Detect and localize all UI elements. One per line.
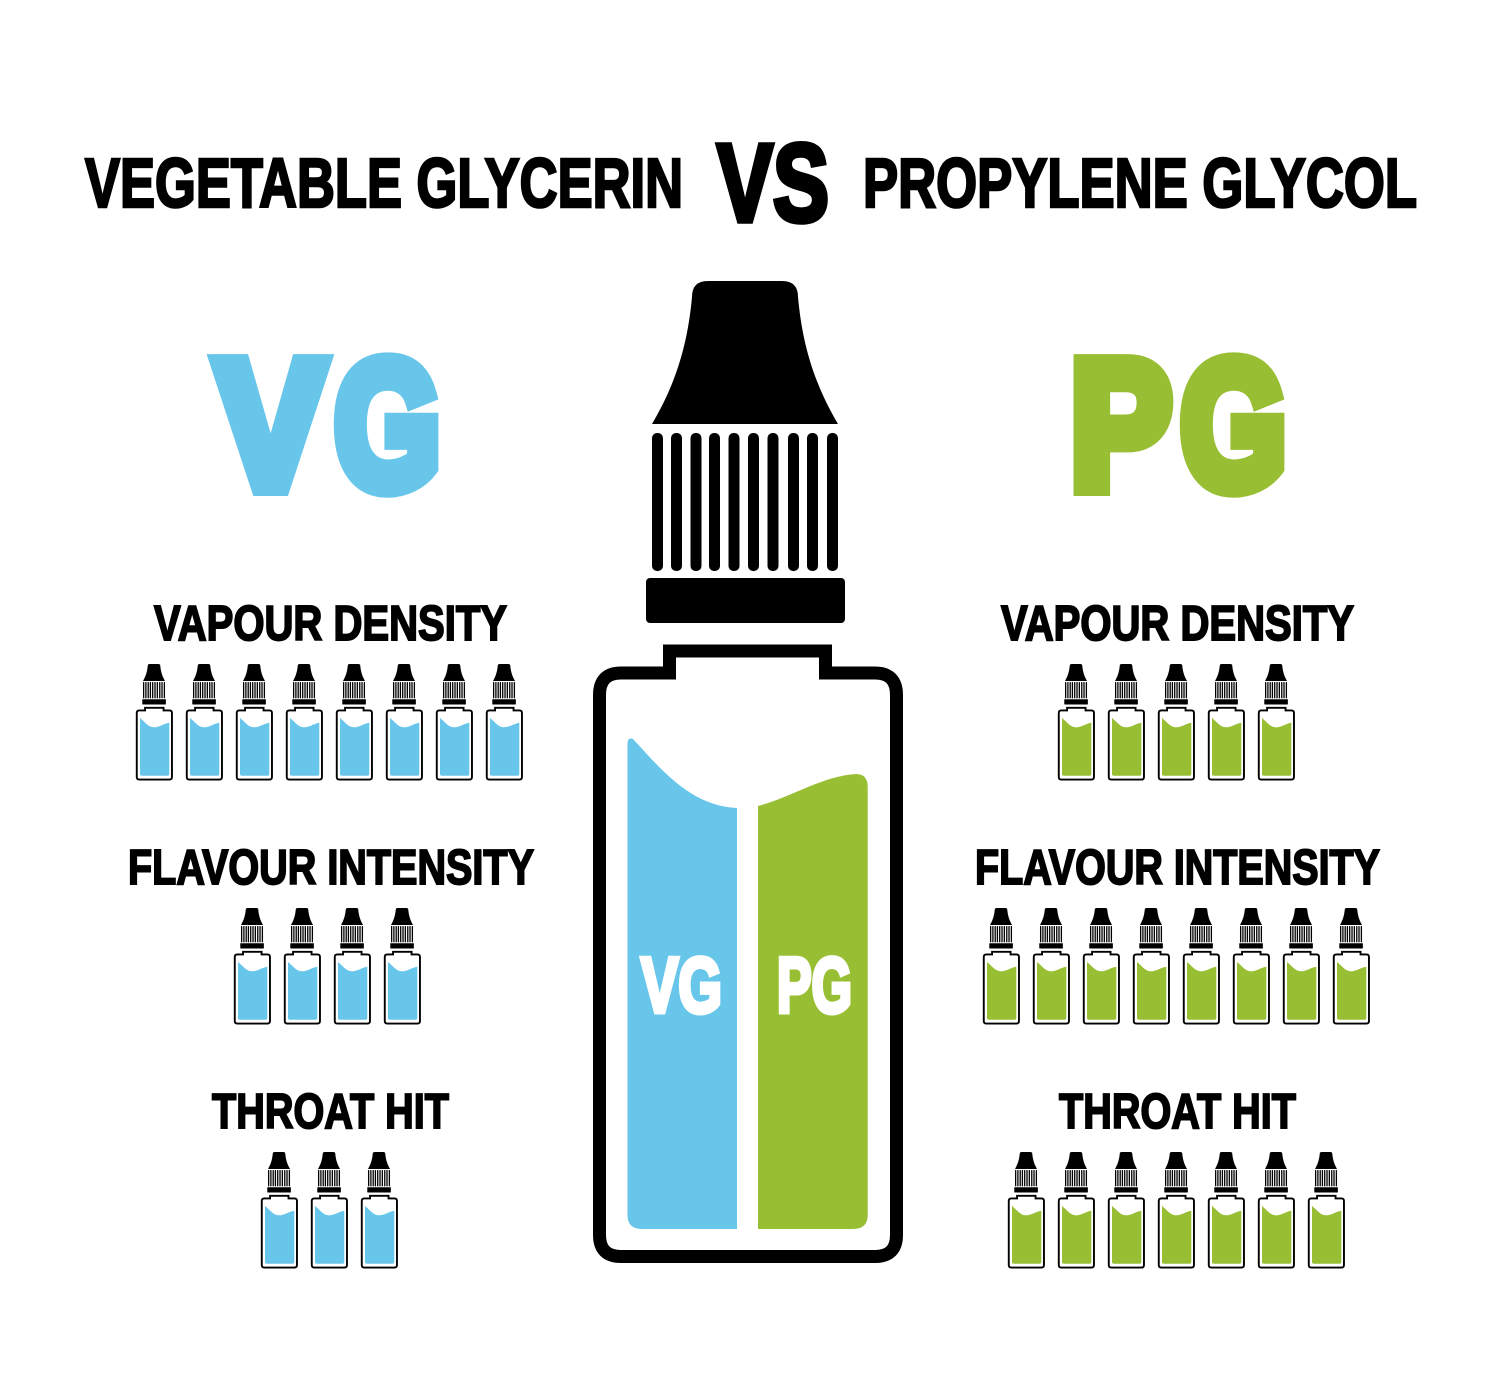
- label: vg vapour density: VAPOUR DENSITY: [154, 597, 507, 651]
- label: pg throat hit: THROAT HIT: [1059, 1085, 1296, 1139]
- rating: pg flavour intensity, 8 bottles: [984, 908, 1369, 1024]
- rating: vg throat hit, 3 bottles: [262, 1152, 397, 1268]
- label: pg vapour density: VAPOUR DENSITY: [1001, 597, 1354, 651]
- rating: vg flavour intensity, 4 bottles: [235, 908, 420, 1024]
- vg liquid: [628, 739, 737, 1229]
- panel: central bottle: [600, 281, 896, 1256]
- rating: pg vapour density, 5 bottles: [1059, 664, 1294, 780]
- heading: VG: G: [335, 325, 440, 526]
- title: vs: VS: [717, 122, 829, 245]
- label: vg throat hit: THROAT HIT: [212, 1085, 449, 1139]
- heading: PG: P: [1071, 325, 1171, 526]
- label: vg flavour intensity: FLAVOUR INTENSITY: [128, 841, 534, 895]
- pg liquid: [758, 774, 868, 1229]
- label: pg flavour intensity: FLAVOUR INTENSITY: [975, 841, 1380, 895]
- bottle body outline: [600, 651, 896, 1256]
- title: vegetable glycerin: VEGETABLE GLYCERIN: [85, 144, 683, 222]
- label: pg on bottle: PG: [777, 941, 852, 1029]
- label: vg on bottle: VG: [641, 941, 722, 1029]
- bottle cap: [646, 281, 845, 623]
- heading: VG: [217, 325, 440, 526]
- panel: vg column: [128, 325, 534, 1268]
- title: [85, 122, 1417, 245]
- rating: pg throat hit, 7 bottles: [1009, 1152, 1344, 1268]
- rating: vg vapour density, 8 bottles: [137, 664, 522, 780]
- heading: PG: [1071, 325, 1286, 526]
- panel: pg column: [975, 325, 1380, 1268]
- heading: PG: G: [1181, 325, 1286, 526]
- heading: VG: V: [217, 325, 324, 526]
